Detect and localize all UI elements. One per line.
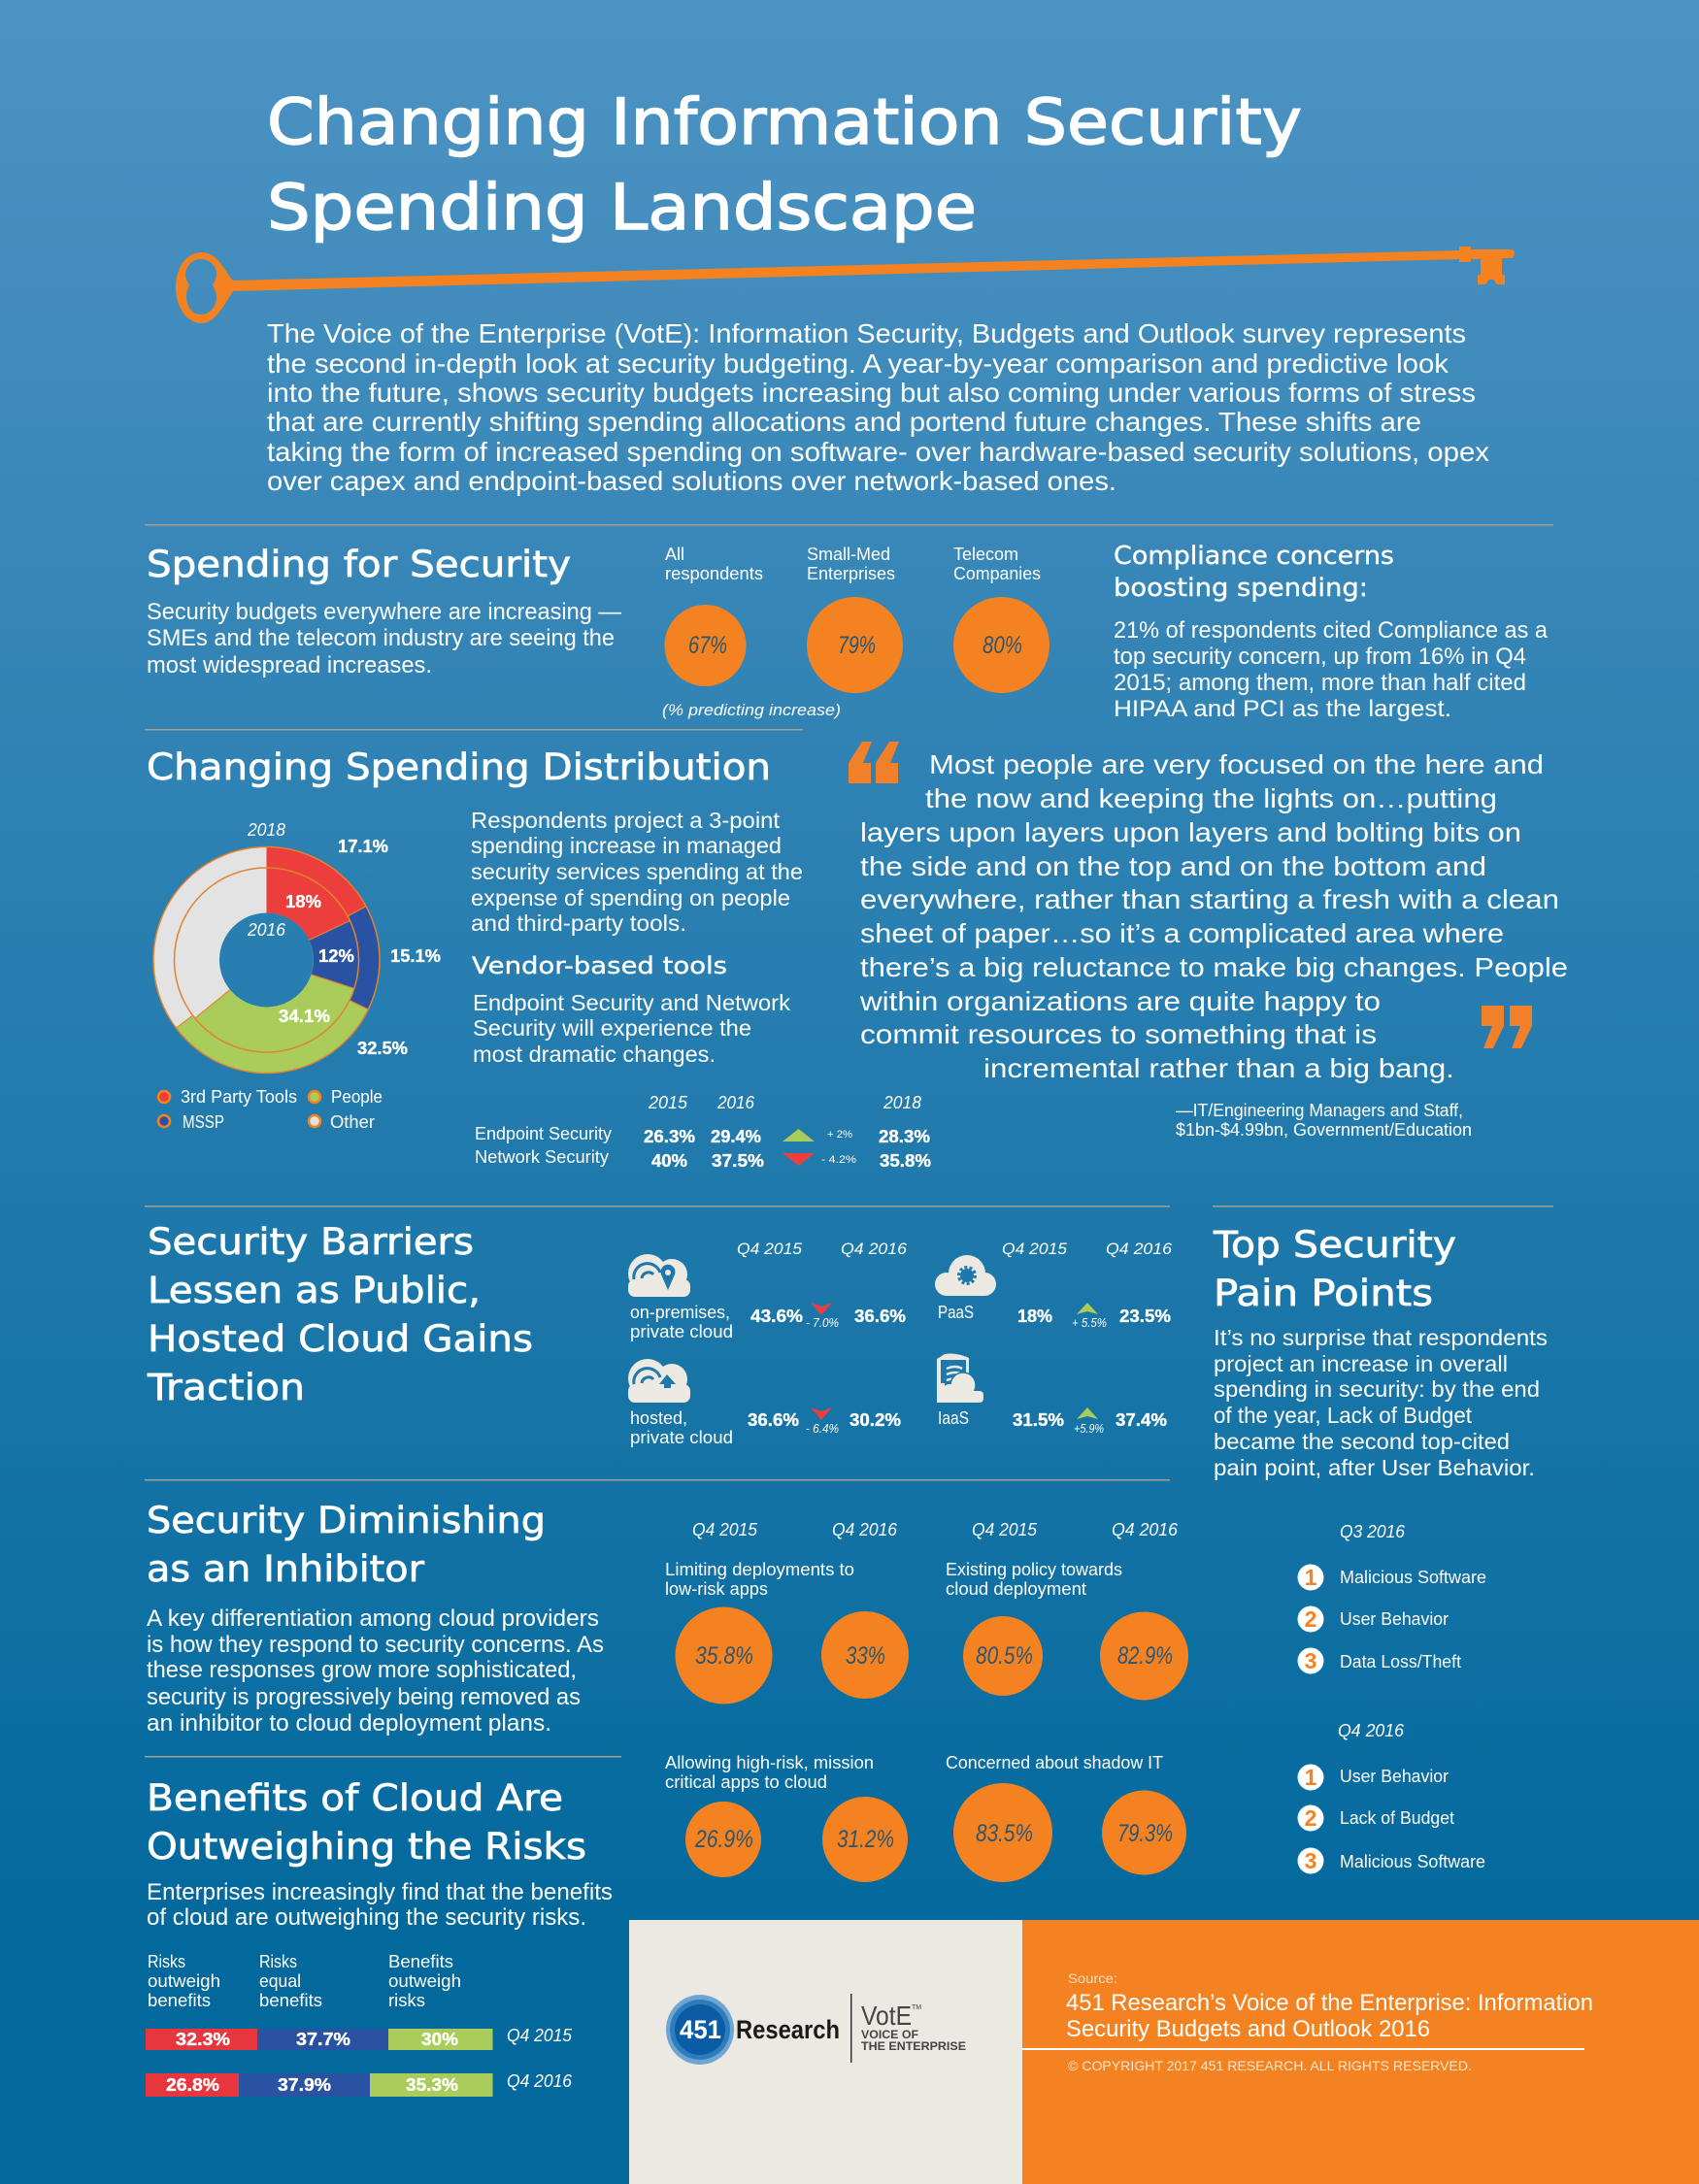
icon: IaaS document cloud [937, 1353, 983, 1403]
row values: 31.5% [1013, 1410, 1064, 1430]
heading: Compliance concerns [1114, 542, 1394, 571]
bar legend: risks [388, 1990, 425, 2010]
circle group: existing policy: Existing policy towards [946, 1559, 1122, 1579]
attribution [1176, 1100, 1472, 1140]
icon: 451 Research logo [666, 1995, 840, 2065]
quote text [859, 749, 1568, 1083]
row values: 36.6% [748, 1410, 799, 1430]
panel: security barriers [147, 1220, 1173, 1447]
heading: Outweighing the Risks [147, 1825, 586, 1868]
icon: 451 Research logo: 451 [680, 2015, 721, 2044]
chart: predicting increase circles: respondents [665, 563, 763, 583]
text block: Security budgets everywhere are increasing — [147, 599, 621, 625]
source text: Security Budgets and Outlook 2016 [1066, 2016, 1430, 2042]
stacked bar: Q4 2016 [146, 2071, 573, 2097]
column headers: Q4 2016 [1106, 1240, 1173, 1258]
table: endpoint and network: Endpoint Security [475, 1123, 613, 1143]
row labels: PaaS [938, 1302, 974, 1322]
heading [147, 1499, 546, 1590]
text block [473, 990, 791, 1067]
heading: Pain Points [1214, 1272, 1433, 1314]
circle group: allowing high-risk: 26.9% [694, 1826, 753, 1853]
circle group: shadow IT: 79.3% [1117, 1820, 1173, 1847]
stacked bar: Q4 2015 [146, 2026, 573, 2050]
intro text: taking the form of increased spending on software- over hardware-based security solutions, opex [267, 437, 1489, 467]
stacked bar: Q4 2015: 30% [421, 2030, 458, 2049]
table: endpoint and network: 2016 [716, 1093, 755, 1112]
chart: predicting increase circles: Telecom [953, 544, 1018, 564]
subheading: Vendor-based tools [472, 952, 727, 979]
stacked bar: Q4 2016: 37.9% [278, 2075, 331, 2095]
bar legend: Risks [148, 1951, 185, 1971]
row labels: hosted, [630, 1407, 687, 1428]
chart: predicting increase circles: (% predicting increase) [662, 701, 841, 719]
stacked bar: Q4 2015: 37.7% [296, 2030, 350, 2049]
heading: boosting spending: [1114, 574, 1368, 603]
row labels: private cloud [630, 1321, 733, 1341]
source text: Source: [1068, 1970, 1117, 1986]
icon: 451 Research logo: Research [736, 2015, 840, 2044]
text block: top security concern, up from 16% in Q4 [1114, 644, 1526, 670]
stacked bar: Q4 2015: Q4 2015 [507, 2026, 573, 2045]
chart: predicting increase circles: All [665, 544, 684, 564]
row labels: on-premises, [630, 1302, 730, 1322]
ranked list: Q4 2016: 1 [1305, 1765, 1317, 1790]
legend: Other [330, 1111, 375, 1132]
panel: benefits of cloud [146, 1776, 613, 2097]
intro text [267, 318, 1489, 496]
column headers: Q4 2015 [737, 1240, 803, 1258]
heading: Lessen as Public, [148, 1269, 481, 1311]
title: Spending Landscape [267, 172, 977, 245]
icon: on-premises cloud [628, 1254, 690, 1297]
circle group: shadow IT [946, 1752, 1186, 1882]
text block: became the second top-cited [1214, 1429, 1510, 1454]
chart: donut: 15.1% [390, 946, 441, 966]
text block: 21% of respondents cited Compliance as a [1114, 617, 1549, 644]
copyright: © COPYRIGHT 2017 451 RESEARCH. ALL RIGHTS RESERVED. [1068, 2058, 1472, 2073]
text block: Endpoint Security and Network [473, 990, 791, 1015]
chart: donut: 32.5% [357, 1039, 408, 1058]
ranked list: Q4 2016: 2 [1305, 1805, 1316, 1831]
quote text: layers upon layers upon layers and bolting bits on [860, 817, 1521, 847]
text block [147, 599, 621, 678]
text block: is how they respond to security concerns. As [147, 1632, 604, 1658]
text block: these responses grow more sophisticated, [147, 1657, 577, 1683]
panel: spending for security [147, 543, 1049, 719]
ranked list: Q3 2016: Data Loss/Theft [1340, 1651, 1461, 1671]
heading: Security Diminishing [147, 1499, 546, 1541]
quote text: there’s a big reluctance to make big changes. People [860, 952, 1568, 982]
text block: security is progressively being removed as [147, 1684, 581, 1710]
row values [748, 1307, 1171, 1430]
change arrows [806, 1303, 1107, 1436]
chart: donut: 2018 [247, 820, 285, 840]
quote text: Most people are very focused on the here and [929, 749, 1544, 779]
legend: MSSP [183, 1111, 224, 1132]
legend: People [331, 1086, 383, 1107]
ranked list: Q4 2016 [1297, 1721, 1485, 1873]
circle group: shadow IT: 83.5% [976, 1820, 1033, 1847]
change arrows: + 5.5% [1072, 1315, 1107, 1330]
icon: hosted cloud [628, 1359, 690, 1403]
attribution: $1bn-$4.99bn, Government/Education [1176, 1119, 1472, 1140]
source text [1066, 1970, 1593, 2042]
quote text: sheet of paper…so it’s a complicated area where [860, 918, 1504, 948]
quote text: the side and on the top and on the bottom and [860, 851, 1486, 881]
chart: predicting increase circles: 79% [838, 632, 876, 659]
icon: orange key [176, 247, 1515, 323]
ranked list: Q3 2016: 1 [1305, 1565, 1317, 1590]
panel: footer source [1022, 1920, 1699, 2184]
attribution: —IT/Engineering Managers and Staff, [1176, 1100, 1463, 1120]
intro text: the second in-depth look at security budgeting. A year-by-year comparison and predictive look [267, 348, 1449, 379]
ranked list: Q4 2016: Malicious Software [1340, 1851, 1485, 1871]
chart: predicting increase circles: 80% [983, 632, 1022, 659]
circle group: limiting deployments: 35.8% [695, 1642, 753, 1670]
text block: It’s no surprise that respondents [1214, 1325, 1548, 1350]
icon: PaaS cloud [935, 1255, 996, 1296]
change arrows: - 7.0% [806, 1315, 839, 1330]
row values: 36.6% [854, 1307, 906, 1326]
heading: Hosted Cloud Gains [148, 1317, 533, 1360]
ranked list: Q3 2016: Malicious Software [1340, 1567, 1486, 1587]
column headers: Q4 2016 [832, 1520, 898, 1539]
text block: Respondents project a 3-point [471, 808, 781, 833]
bar legend: equal [259, 1970, 301, 1991]
text block: project an increase in overall [1214, 1351, 1508, 1376]
ranked list: Q3 2016: 2 [1305, 1606, 1316, 1632]
circle group: limiting deployments [665, 1559, 909, 1704]
circle group: shadow IT: Concerned about shadow IT [946, 1752, 1163, 1772]
text block: expense of spending on people [471, 885, 790, 910]
heading: as an Inhibitor [147, 1547, 425, 1590]
intro text: The Voice of the Enterprise (VotE): Information Security, Budgets and Outlook survey represents [267, 318, 1466, 348]
stacked bar: Q4 2016: 26.8% [166, 2075, 219, 2095]
ranked list: Q4 2016: 3 [1305, 1848, 1316, 1873]
row labels: IaaS [938, 1407, 969, 1428]
table: endpoint and network: 35.8% [880, 1151, 931, 1171]
ranked list: Q3 2016: 3 [1305, 1648, 1316, 1673]
text block: spending increase in managed [471, 833, 782, 858]
ranked list: Q4 2016: User Behavior [1340, 1766, 1449, 1786]
legend [158, 1086, 383, 1132]
text block: spending in security: by the end [1214, 1376, 1540, 1402]
chart: predicting increase circles: Companies [953, 563, 1041, 583]
text block: pain point, after User Behavior. [1214, 1455, 1535, 1480]
panel: cloud circles [665, 1520, 1188, 1882]
intro text: that are currently shifting spending allocations and portend future changes. These shifts are [267, 407, 1421, 437]
heading: Benefits of Cloud Are [147, 1776, 563, 1819]
heading [1114, 542, 1394, 603]
heading: Security Barriers [148, 1220, 474, 1263]
table: endpoint and network: Network Security [475, 1146, 610, 1167]
quote text: within organizations are quite happy to [859, 986, 1381, 1016]
heading: Spending for Security [147, 543, 571, 585]
column headers [737, 1240, 1173, 1258]
heading: Traction [147, 1366, 305, 1408]
heading [147, 1220, 533, 1408]
text block [471, 808, 803, 936]
text block: and third-party tools. [471, 910, 686, 936]
text block [1214, 1325, 1548, 1480]
bar legend: benefits [148, 1990, 211, 2010]
circle group: existing policy: 80.5% [976, 1642, 1033, 1670]
text block: SMEs and the telecom industry are seeing the [147, 625, 615, 651]
text block: security services spending at the [471, 859, 803, 884]
row values: 23.5% [1119, 1307, 1171, 1326]
text block [147, 1879, 613, 1931]
table: endpoint and network: + 2% [827, 1129, 852, 1141]
table: endpoint and network: 28.3% [879, 1127, 930, 1146]
heading [147, 1776, 586, 1868]
chart: predicting increase circles: 67% [688, 632, 727, 659]
VotE wordmark: VOICE OF [861, 2028, 918, 2041]
table: endpoint and network: - 4.2% [821, 1154, 856, 1166]
chart: donut: 34.1% [279, 1007, 330, 1026]
row values: 30.2% [850, 1410, 901, 1430]
circle group: allowing high-risk [665, 1752, 908, 1882]
heading: Top Security [1213, 1223, 1456, 1266]
circle group: limiting deployments: 33% [846, 1642, 885, 1670]
chart: predicting increase circles: Small-Med [807, 544, 890, 564]
ranked list: Q3 2016: User Behavior [1340, 1608, 1449, 1629]
title [267, 86, 1302, 245]
bar legend: outweigh [148, 1970, 220, 1991]
VotE wordmark: VotE [861, 2001, 912, 2031]
circle group: existing policy [946, 1559, 1188, 1701]
chart: donut [153, 820, 441, 1074]
panel: top security pain points [1213, 1223, 1548, 1873]
intro text: into the future, shows security budgets increasing but also coming under various forms of stress [267, 378, 1476, 408]
circle group: allowing high-risk: 31.2% [837, 1826, 894, 1853]
table: endpoint and network: 2018 [883, 1093, 921, 1112]
row values: 37.4% [1116, 1410, 1167, 1430]
row values: 43.6% [750, 1307, 803, 1326]
ranked list: Q3 2016: Q3 2016 [1340, 1522, 1406, 1541]
text block: most widespread increases. [147, 652, 432, 678]
quote text: everywhere, rather than starting a fresh with a clean [860, 884, 1559, 914]
table: endpoint and network: 37.5% [712, 1151, 764, 1171]
VotE wordmark: TM [912, 2004, 921, 2011]
VotE wordmark: THE ENTERPRISE [861, 2039, 966, 2053]
table: endpoint and network: 40% [651, 1151, 687, 1171]
text block: Enterprises increasingly find that the benefits [147, 1879, 613, 1905]
table: endpoint and network: 29.4% [711, 1127, 761, 1146]
quote text: incremental rather than a big bang. [983, 1053, 1454, 1083]
bar legend [148, 1951, 461, 2010]
bar legend: Benefits [388, 1951, 453, 1971]
table: endpoint and network [475, 1093, 931, 1171]
bar legend: Risks [259, 1951, 297, 1971]
icon: closing quote mark [1482, 1006, 1532, 1048]
intro text: over capex and endpoint-based solutions over network-based ones. [267, 466, 1116, 496]
row values: 18% [1017, 1307, 1052, 1326]
stacked bar: Q4 2016: 35.3% [406, 2075, 458, 2095]
column headers: Q4 2015 [972, 1520, 1038, 1539]
text block: 2015; among them, more than half cited [1114, 670, 1526, 696]
column headers: Q4 2015 [1002, 1240, 1068, 1258]
ranked list: Q4 2016: Q4 2016 [1338, 1721, 1405, 1740]
stacked bar: Q4 2016: Q4 2016 [507, 2071, 573, 2091]
VotE wordmark [861, 2001, 966, 2053]
chart: predicting increase circles: Enterprises [807, 563, 895, 583]
text block: A key differentiation among cloud providers [147, 1605, 599, 1632]
source text: 451 Research’s Voice of the Enterprise: Information [1066, 1990, 1593, 2016]
heading: Changing Spending Distribution [147, 745, 771, 788]
column headers [692, 1520, 1179, 1539]
chart: donut: 17.1% [338, 837, 388, 856]
quote text: commit resources to something that is [860, 1019, 1377, 1049]
circle group: existing policy: 82.9% [1117, 1642, 1173, 1670]
table: endpoint and network: 2015 [648, 1093, 688, 1112]
row labels [630, 1302, 974, 1447]
column headers: Q4 2016 [1112, 1520, 1179, 1539]
legend: 3rd Party Tools [181, 1086, 297, 1107]
panel: changing spending distribution [147, 745, 931, 1171]
change arrows: - 6.4% [806, 1421, 839, 1436]
column headers: Q4 2015 [692, 1520, 758, 1539]
chart: donut: 2016 [247, 920, 286, 940]
circle group: limiting deployments: low-risk apps [665, 1578, 768, 1599]
panel: quote [849, 742, 1568, 1140]
bar legend: outweigh [388, 1970, 461, 1991]
stacked bar: Q4 2015: 32.3% [176, 2030, 230, 2049]
text block: an inhibitor to cloud deployment plans. [147, 1710, 551, 1737]
column headers: Q4 2016 [841, 1240, 908, 1258]
panel: security diminishing [147, 1499, 604, 1737]
text block [147, 1605, 604, 1737]
circle group: allowing high-risk: critical apps to cloud [665, 1771, 827, 1792]
panel: compliance concerns [1114, 542, 1549, 722]
heading [1213, 1223, 1456, 1314]
chart: donut: 18% [285, 892, 321, 911]
text block: HIPAA and PCI as the largest. [1114, 696, 1451, 722]
text block: of cloud are outweighing the security risks. [147, 1904, 586, 1931]
ranked list: Q3 2016 [1297, 1522, 1486, 1673]
text block: Security will experience the [473, 1015, 751, 1041]
bar legend: benefits [259, 1990, 322, 2010]
change arrows: +5.9% [1074, 1421, 1104, 1436]
title: Changing Information Security [267, 86, 1302, 159]
quote text: the now and keeping the lights on…putting [925, 783, 1497, 813]
chart: donut: 12% [318, 946, 354, 966]
circle group: limiting deployments: Limiting deployments to [665, 1559, 854, 1579]
circle group: existing policy: cloud deployment [946, 1578, 1086, 1599]
text block [1114, 617, 1549, 722]
text block: most dramatic changes. [473, 1042, 716, 1067]
ranked list: Q4 2016: Lack of Budget [1340, 1807, 1454, 1828]
table: endpoint and network: 26.3% [644, 1127, 695, 1146]
text block: of the year, Lack of Budget [1214, 1403, 1473, 1428]
circle group: allowing high-risk: Allowing high-risk, mission [665, 1752, 874, 1772]
icon: opening quote mark [849, 742, 899, 783]
chart: predicting increase circles [662, 544, 1049, 719]
row labels: private cloud [630, 1427, 733, 1447]
panel: footer logo [629, 1920, 1022, 2184]
